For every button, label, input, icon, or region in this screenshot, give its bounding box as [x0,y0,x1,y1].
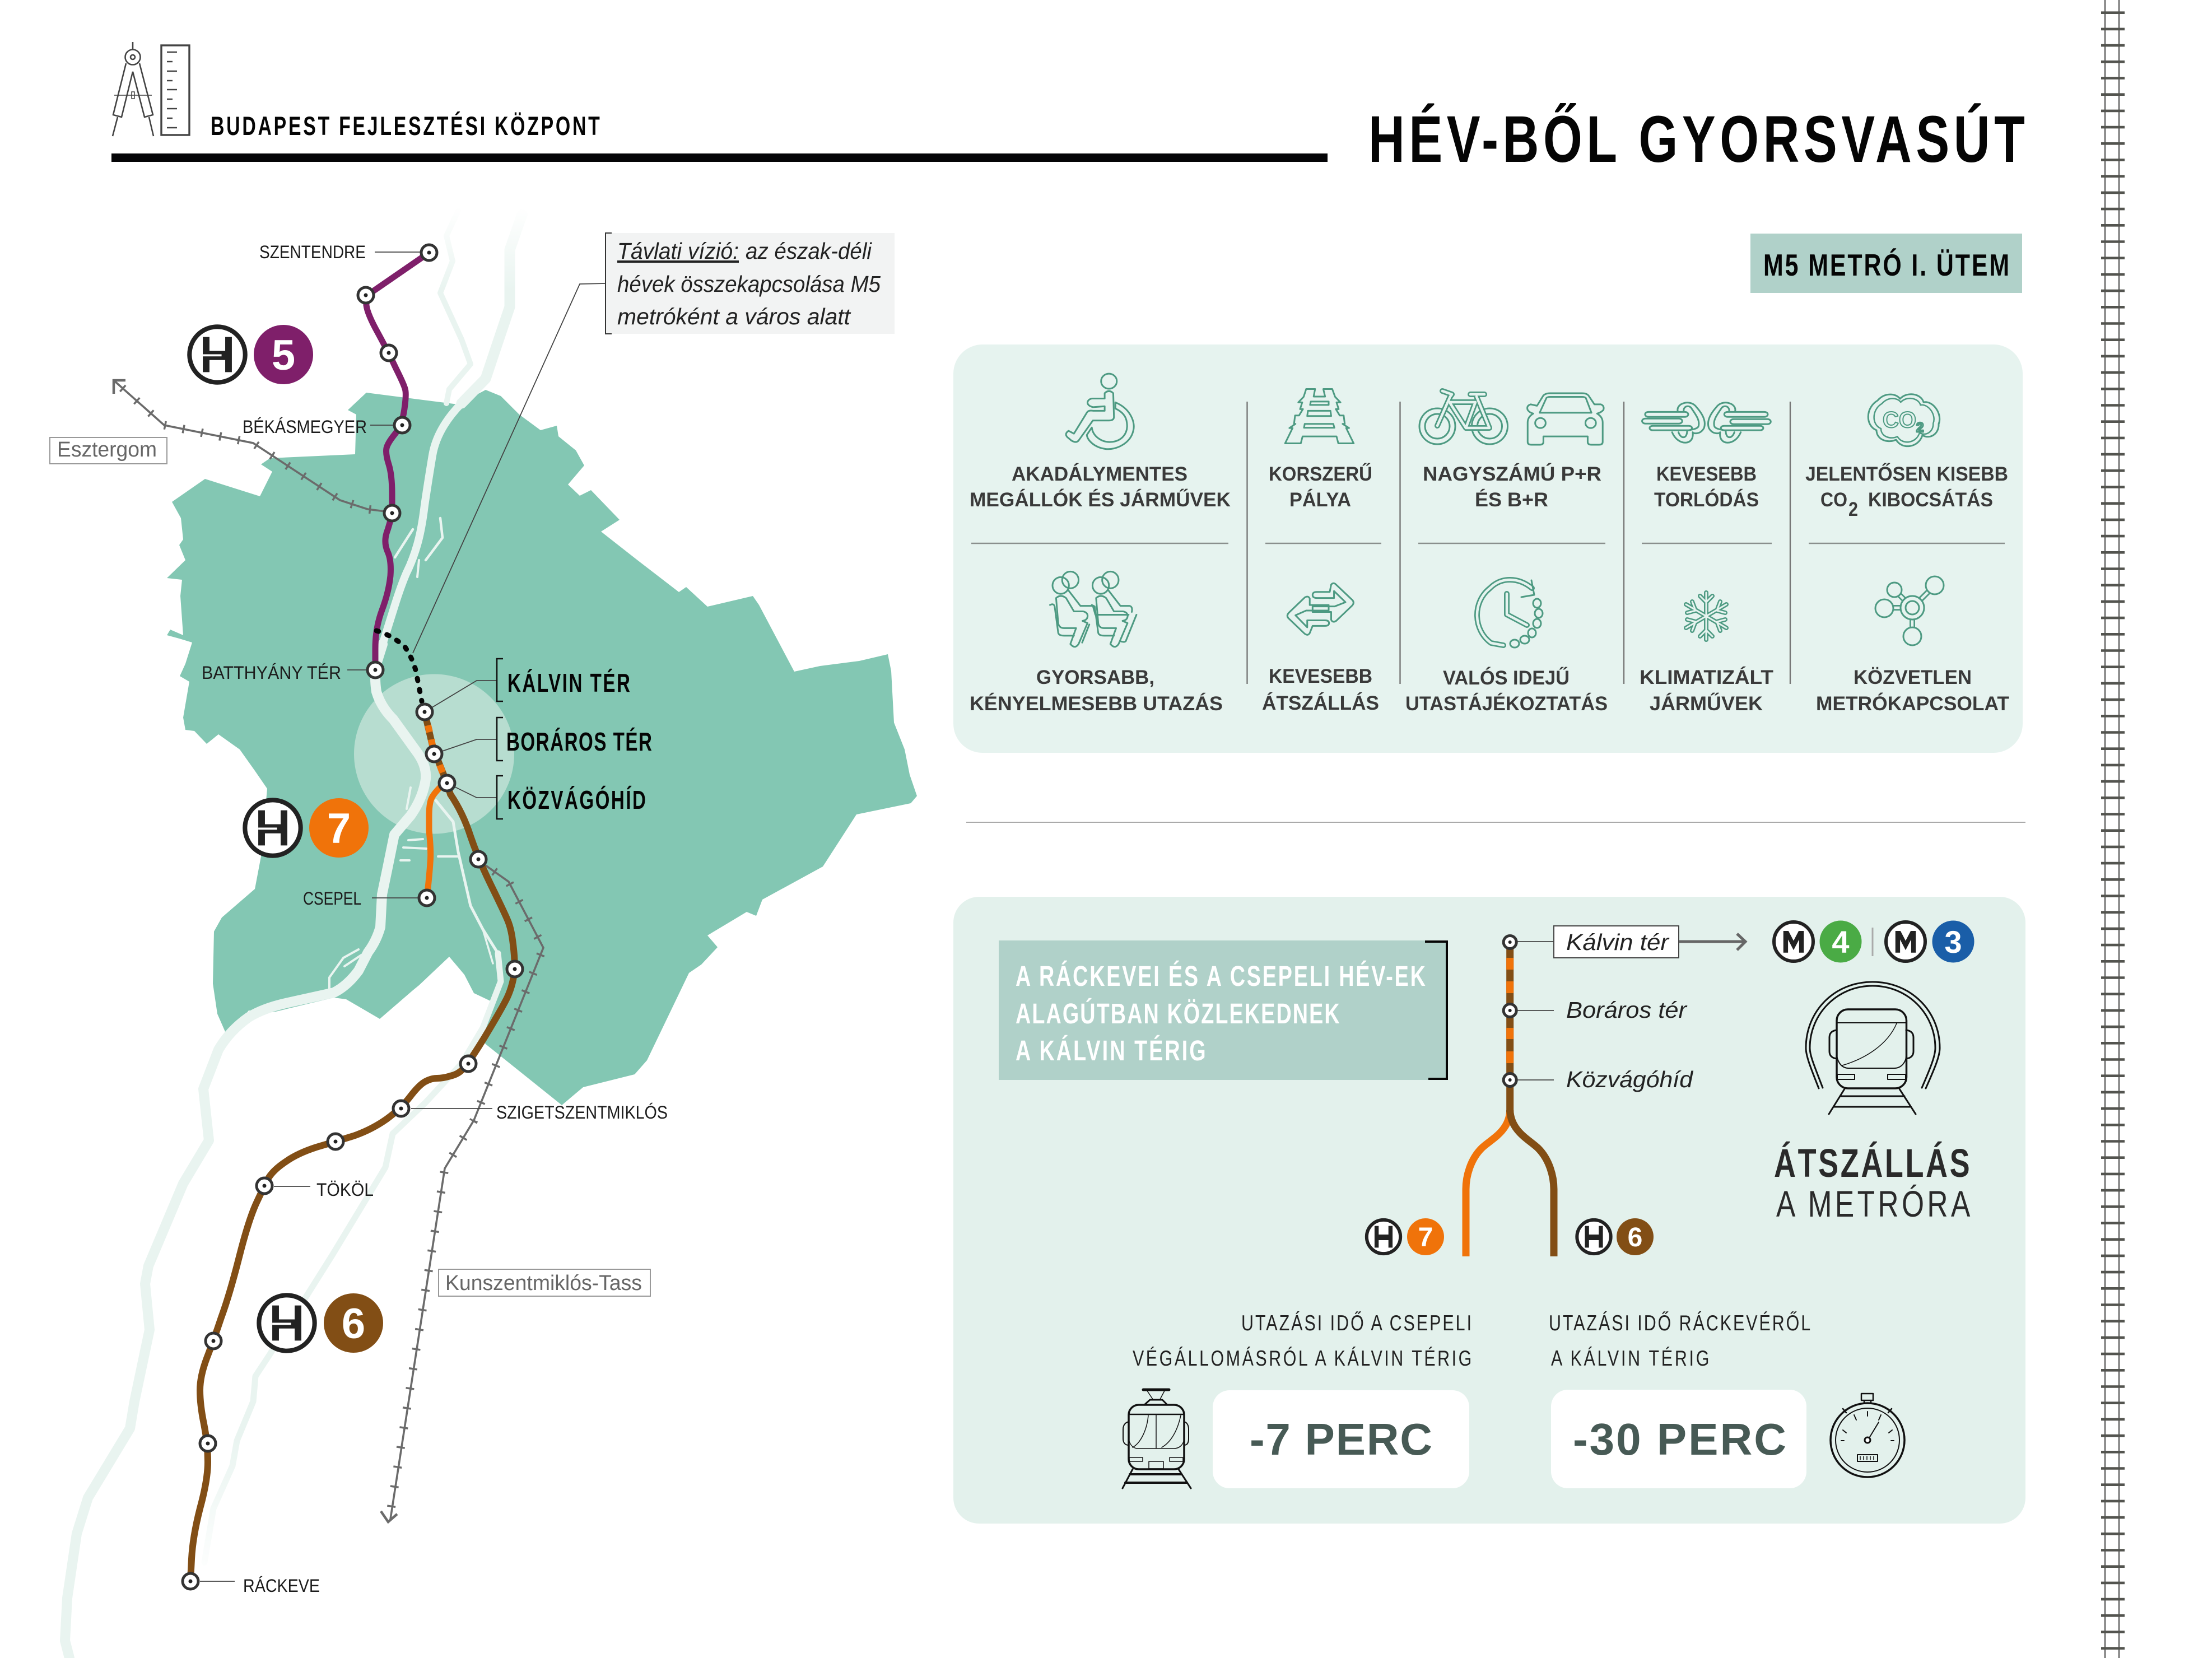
inner-city station labels with brackets: KÁLVIN TÉR [507,669,630,697]
icon: bicycle [1419,391,1508,444]
heading: M5 metró I. ütem: M5 METRÓ I. ÜTEM [1763,248,2009,282]
text: travel time from Csepel: UTAZÁSI IDŐ A CSEPELI [1241,1311,1471,1335]
railway to Kunszentmiklós-Tass [381,865,543,1522]
badge: H7 small [1367,1218,1444,1255]
station names: CSEPEL [303,888,361,909]
text: travel time from Ráckeve [1549,1311,1810,1371]
callout: long-term vision: az észak-déli [746,238,873,264]
benefit label: faster, more comfortable travel [970,667,1223,715]
label: Kunszentmiklós-Tass: Kunszentmiklós-Tass [445,1272,642,1295]
heading: transfer to the metro: A METRÓRA [1776,1183,1971,1224]
benefit label: P+R and B+R: ÉS B+R [1475,488,1548,511]
icon: congestion [1642,403,1771,443]
text: travel time from Ráckeve: A KÁLVIN TÉRIG [1551,1346,1709,1371]
benefit label: lower CO2 emission: CO [1820,489,1847,511]
highlighted inner-city circle [354,674,514,833]
badge: metro M4 [1774,921,1862,962]
station names: BÉKÁSMEGYER [243,417,367,437]
H5 badge [189,325,313,384]
badge: H6 small: 6 [1628,1223,1642,1252]
icon: metro connection nodes [1875,576,1944,645]
callout: tunnel to Kálvin tér [999,940,1447,1080]
box: minus 30 minutes: -30 PERC [1573,1414,1786,1464]
box: minus 7 minutes: -7 PERC [1250,1414,1432,1464]
schematic line diagram: Boráros tér [1566,997,1688,1023]
header rule [111,153,1328,162]
icon: real-time clock [1477,580,1543,648]
callout: long-term vision: metróként a város alatt [617,304,851,329]
station names [202,242,668,1596]
callout: tunnel to Kálvin tér: A RÁCKEVEI ÉS A CSEPELI HÉV-EK [1016,960,1426,992]
station names: RÁCKEVE [243,1576,320,1596]
grid separators [1247,402,1790,684]
benefit label: faster, more comfortable travel: KÉNYELMESEBB UTAZÁS [970,692,1223,715]
benefit label: fewer transfers [1262,665,1379,714]
badge: metro M3: 3 [1944,924,1962,960]
stations [183,245,523,1589]
railway to Esztergom [114,380,385,511]
station leader lines [200,252,606,1581]
panel: benefits [953,344,2023,753]
benefit label: modern track: PÁLYA [1289,488,1351,511]
benefit label: lower CO2 emission [1805,463,2008,520]
callout: long-term vision: Távlati vízió: [617,238,739,264]
benefit label: modern track [1269,463,1372,511]
benefit label: direct metro connection: KÖZVETLEN [1854,667,1972,688]
benefit label: modern track: KORSZERŰ [1269,463,1372,485]
box: minus 7 minutes [1213,1390,1469,1488]
icon: tram front [1123,1390,1191,1488]
benefit label: less congestion: KEVESEBB [1656,463,1757,485]
icon: railway track [1285,389,1354,444]
icon: CO2 cloud [1868,394,1940,446]
benefit label: lower CO2 emission: 2 [1848,499,1858,520]
schematic line diagram: Kálvin tér [1566,929,1670,955]
benefit label: accessibility: MEGÁLLÓK ÉS JÁRMŰVEK [970,488,1231,511]
label: Esztergom: Esztergom [57,438,157,462]
benefit label: accessibility [970,463,1231,511]
heading: transfer to the metro: ÁTSZÁLLÁS [1774,1142,1970,1186]
divider between metro badges [1872,928,1873,956]
schematic line diagram: Közvágóhíd [1566,1066,1693,1092]
benefit label: accessibility: AKADÁLYMENTES [1012,463,1188,485]
badge: metro M3 [1886,921,1974,962]
H7 badge [245,798,369,858]
icon: CO2 cloud: CO [1883,408,1916,432]
river Danube [65,211,522,1658]
shared section stripes [428,725,443,772]
callout: long-term vision: hévek összekapcsolása M5 [617,271,881,297]
header icon: compass and ruler [113,42,189,136]
benefit label: lower CO2 emission: JELENTŐSEN KISEBB [1805,463,2008,485]
benefit label: direct metro connection: METRÓKAPCSOLAT [1816,692,2009,715]
panel: map of Budapest and HÉV lines [50,211,917,1658]
inner-city station labels with brackets: KÖZVÁGÓHÍD [507,785,646,814]
callout: long-term vision [606,233,895,334]
panel: Kálvin tér tunnel section [953,897,2025,1524]
text: travel time from Csepel: VÉGÁLLOMÁSRÓL A KÁLVIN TÉRIG [1133,1346,1471,1371]
station names: SZIGETSZENTMIKLÓS [496,1102,668,1123]
station names: SZENTENDRE [259,242,366,262]
heading: transfer to the metro [1774,1142,1971,1224]
text: travel time from Ráckeve: UTAZÁSI IDŐ RÁCKEVÉRŐL [1549,1311,1810,1335]
heading: M5 metró I. ütem [1750,234,2022,293]
badge: metro M4: 4 [1832,924,1850,960]
icon: wheelchair [1066,374,1134,449]
inner-city station labels with brackets: BORÁROS TÉR [506,728,652,756]
text: travel time from Csepel [1133,1311,1471,1371]
benefit label: real-time information [1405,667,1608,715]
benefit label: real-time information: VALÓS IDEJŰ [1443,667,1570,689]
benefit label: air-conditioned vehicles: JÁRMŰVEK [1650,692,1763,715]
station names: BATTHYÁNY TÉR [202,663,341,683]
station names: TÖKÖL [316,1180,374,1200]
H7 badge: 7 [327,805,351,853]
box: minus 30 minutes [1551,1390,1806,1488]
benefit label: fewer transfers: ÁTSZÁLLÁS [1262,692,1379,714]
dotted future link [376,631,422,701]
title: HÉV-BŐL GYORSVASÚT [1368,103,2025,176]
icon: transfer arrows [1287,583,1353,635]
badge: H7 small: 7 [1418,1223,1433,1252]
icon: seated passengers [1050,571,1137,647]
benefit label: direct metro connection [1816,667,2009,715]
schematic line diagram [1466,926,1693,1256]
benefit label: less congestion [1654,463,1759,511]
icon: stopwatch [1831,1394,1904,1477]
callout: tunnel to Kálvin tér: ALAGÚTBAN KÖZLEKEDNEK [1016,997,1340,1030]
section divider [966,822,2025,823]
benefit label: air-conditioned vehicles: KLIMATIZÁLT [1640,666,1773,688]
icon: snowflake [1686,593,1726,640]
badge: H6 small [1577,1218,1654,1255]
map: Budapest territory [167,390,917,1105]
arrow to metro lines [1679,934,1745,950]
header organisation name: BUDAPEST FEJLESZTÉSI KÖZPONT [211,111,600,141]
benefit label: faster, more comfortable travel: GYORSABB, [1036,667,1154,688]
line H6 [190,712,515,1581]
benefit label: less congestion: TORLÓDÁS [1654,488,1759,511]
callout: tunnel to Kálvin tér: A KÁLVIN TÉRIG [1016,1034,1206,1066]
benefit label: P+R and B+R [1423,463,1601,511]
benefit label: lower CO2 emission: KIBOCSÁTÁS [1868,488,1993,511]
icon: train in tunnel [1806,982,1940,1114]
H6 badge: 6 [342,1300,365,1348]
icon: CO2 cloud: 2 [1916,420,1924,435]
inner-city station labels with brackets [497,659,652,819]
decorative railway strip at right edge [2105,0,2119,1658]
line H5 [366,253,429,670]
line H7 [427,785,442,898]
icon: car [1528,393,1604,445]
benefit label: air-conditioned vehicles [1640,666,1773,715]
benefit label: real-time information: UTASTÁJÉKOZTATÁS [1405,692,1608,715]
benefit label: P+R and B+R: NAGYSZÁMÚ P+R [1423,463,1601,485]
H6 badge [259,1293,383,1353]
H5 badge: 5 [272,332,295,379]
benefit label: fewer transfers: KEVESEBB [1269,665,1372,687]
